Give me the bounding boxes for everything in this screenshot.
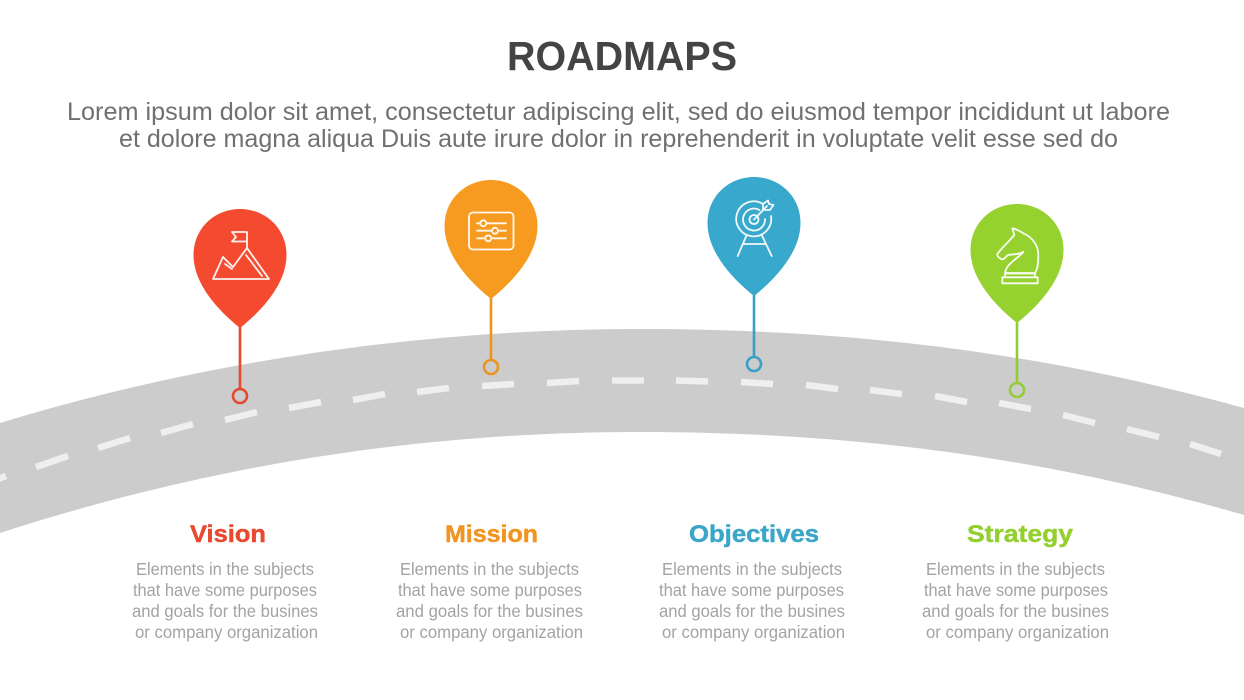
title: ROADMAPS [507, 33, 737, 79]
pin: vision [194, 209, 286, 403]
text: mission description: that have some purposes [398, 580, 582, 600]
heading: vision: Vision [190, 521, 266, 548]
icon: target on easel [736, 200, 774, 256]
text: mission description [396, 559, 583, 642]
icon: mountain with flag [213, 232, 269, 279]
text: vision description: or company organization [135, 622, 318, 642]
heading: strategy: Strategy [967, 521, 1074, 548]
pin: strategy [970, 204, 1064, 397]
text: strategy description: or company organization [926, 622, 1109, 642]
text: vision description: and goals for the busines [132, 601, 318, 621]
text: vision description: that have some purposes [133, 580, 317, 600]
text: objectives description: or company organization [662, 622, 845, 642]
text: mission description: and goals for the busines [396, 601, 583, 621]
icon: chess knight [997, 228, 1038, 283]
subtitle text block: Lorem ipsum dolor sit amet, consectetur adipiscing elit, sed do eiusmod tempor incididunt ut labore [67, 98, 1170, 126]
text: objectives description: and goals for the busines [659, 601, 845, 621]
curved road [0, 329, 1244, 533]
text: mission description: or company organization [400, 622, 583, 642]
column: mission [396, 521, 583, 642]
column: vision [132, 521, 318, 642]
text: strategy description [922, 559, 1109, 642]
text: strategy description: that have some purposes [924, 580, 1108, 600]
pin: objectives [708, 177, 800, 371]
pin: mission [444, 180, 538, 374]
text: strategy description: and goals for the busines [922, 601, 1109, 621]
text: objectives description: that have some purposes [659, 580, 844, 600]
column: objectives [659, 521, 845, 642]
column: strategy [922, 521, 1109, 642]
subtitle text block: et dolore magna aliqua Duis aute irure dolor in reprehenderit in voluptate velit esse sed do [119, 125, 1118, 153]
subtitle text block [67, 98, 1170, 153]
text: vision description: Elements in the subjects [136, 559, 314, 579]
text: vision description [132, 559, 318, 642]
text: objectives description: Elements in the subjects [662, 559, 842, 579]
heading: objectives: Objectives [689, 521, 819, 548]
text: mission description: Elements in the subjects [400, 559, 579, 579]
text: strategy description: Elements in the subjects [926, 559, 1105, 579]
text: objectives description [659, 559, 845, 642]
icon: sliders panel [469, 212, 514, 250]
heading: mission: Mission [445, 521, 538, 548]
